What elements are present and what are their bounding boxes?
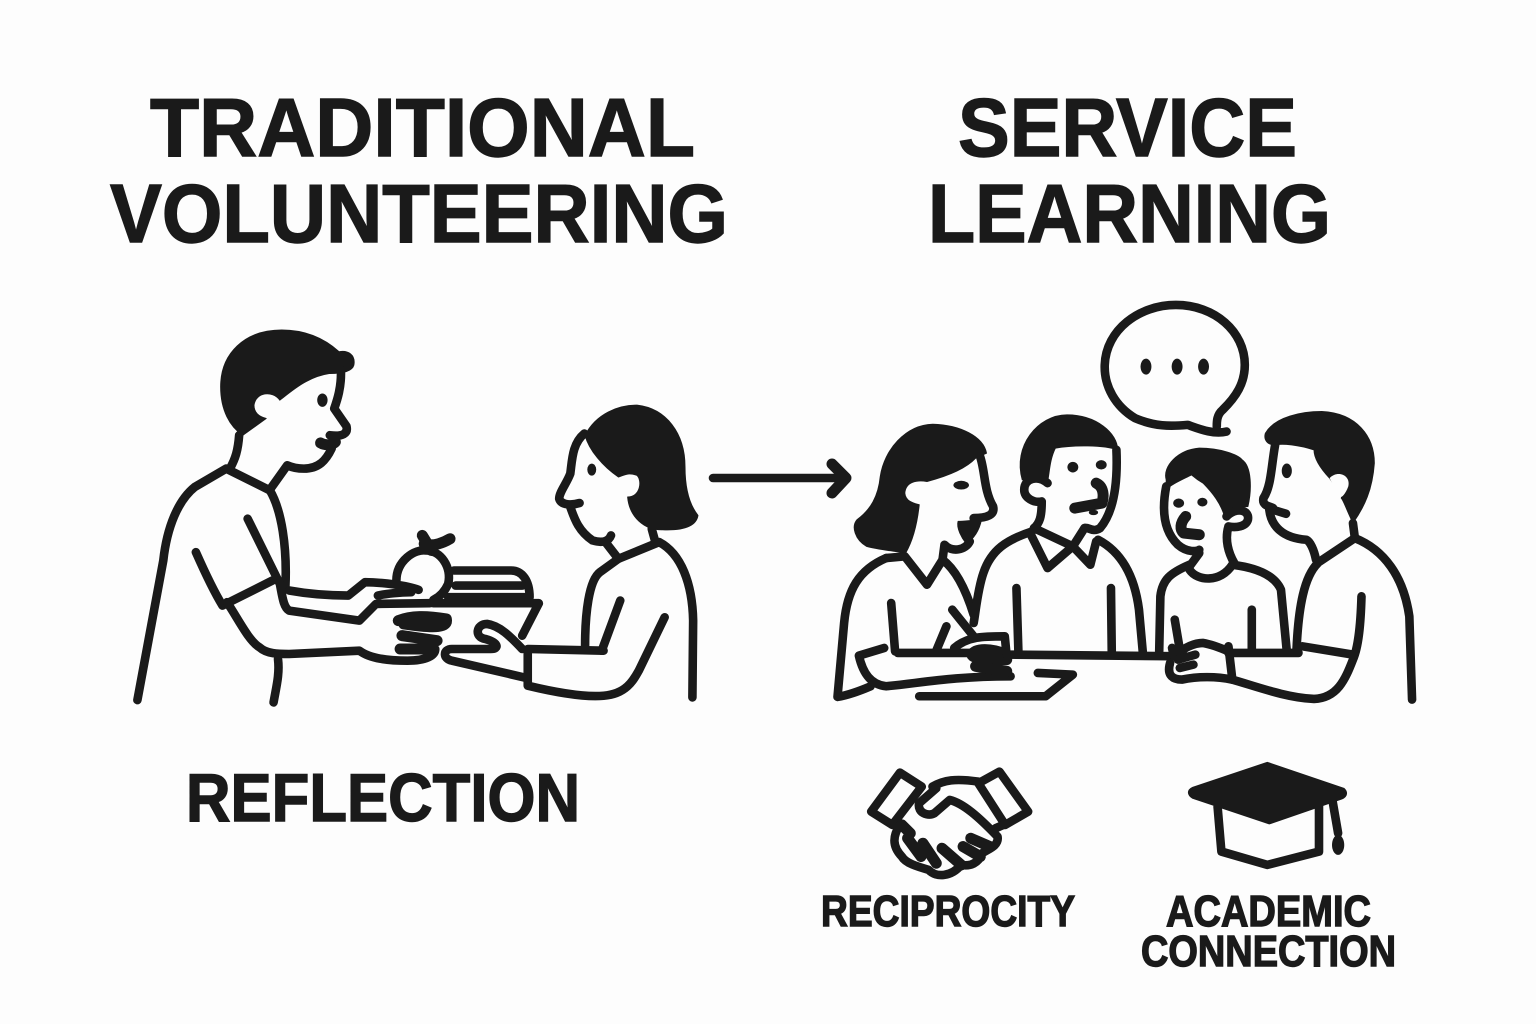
heading: traditional volunteering: VOLUNTEERING (110, 167, 728, 260)
heading: traditional volunteering: TRADITIONAL (150, 81, 695, 174)
table edge and paper (898, 653, 1186, 696)
label: academic connection: ACADEMIC (1166, 887, 1371, 936)
figure: volunteer man (137, 330, 447, 702)
heading: service learning: SERVICE (958, 81, 1297, 174)
illustration: group discussion at a table (838, 305, 1412, 700)
icon: speech bubble (1105, 305, 1245, 432)
label: reciprocity: RECIPROCITY (821, 887, 1075, 936)
icon: graduation cap (1188, 762, 1347, 865)
figure: man in profile (1169, 412, 1412, 700)
heading: service learning: LEARNING (928, 167, 1331, 260)
label: academic connection: CONNECTION (1141, 927, 1396, 976)
heading: traditional volunteering (110, 81, 728, 260)
figure: woman writing (838, 424, 1011, 697)
figure: recipient woman (445, 405, 698, 697)
arrow: from traditional to service learning (713, 464, 846, 493)
illustration: volunteer handing items to recipient (137, 330, 698, 702)
icon: apple (396, 535, 450, 600)
figure: man with collar (974, 415, 1143, 653)
figure: younger student (1159, 448, 1287, 651)
icon: handshake (871, 772, 1028, 875)
heading: service learning (928, 81, 1331, 260)
icon: stack of books (433, 570, 539, 636)
label: academic connection (1141, 887, 1396, 976)
label: reflection: REFLECTION (186, 760, 580, 836)
